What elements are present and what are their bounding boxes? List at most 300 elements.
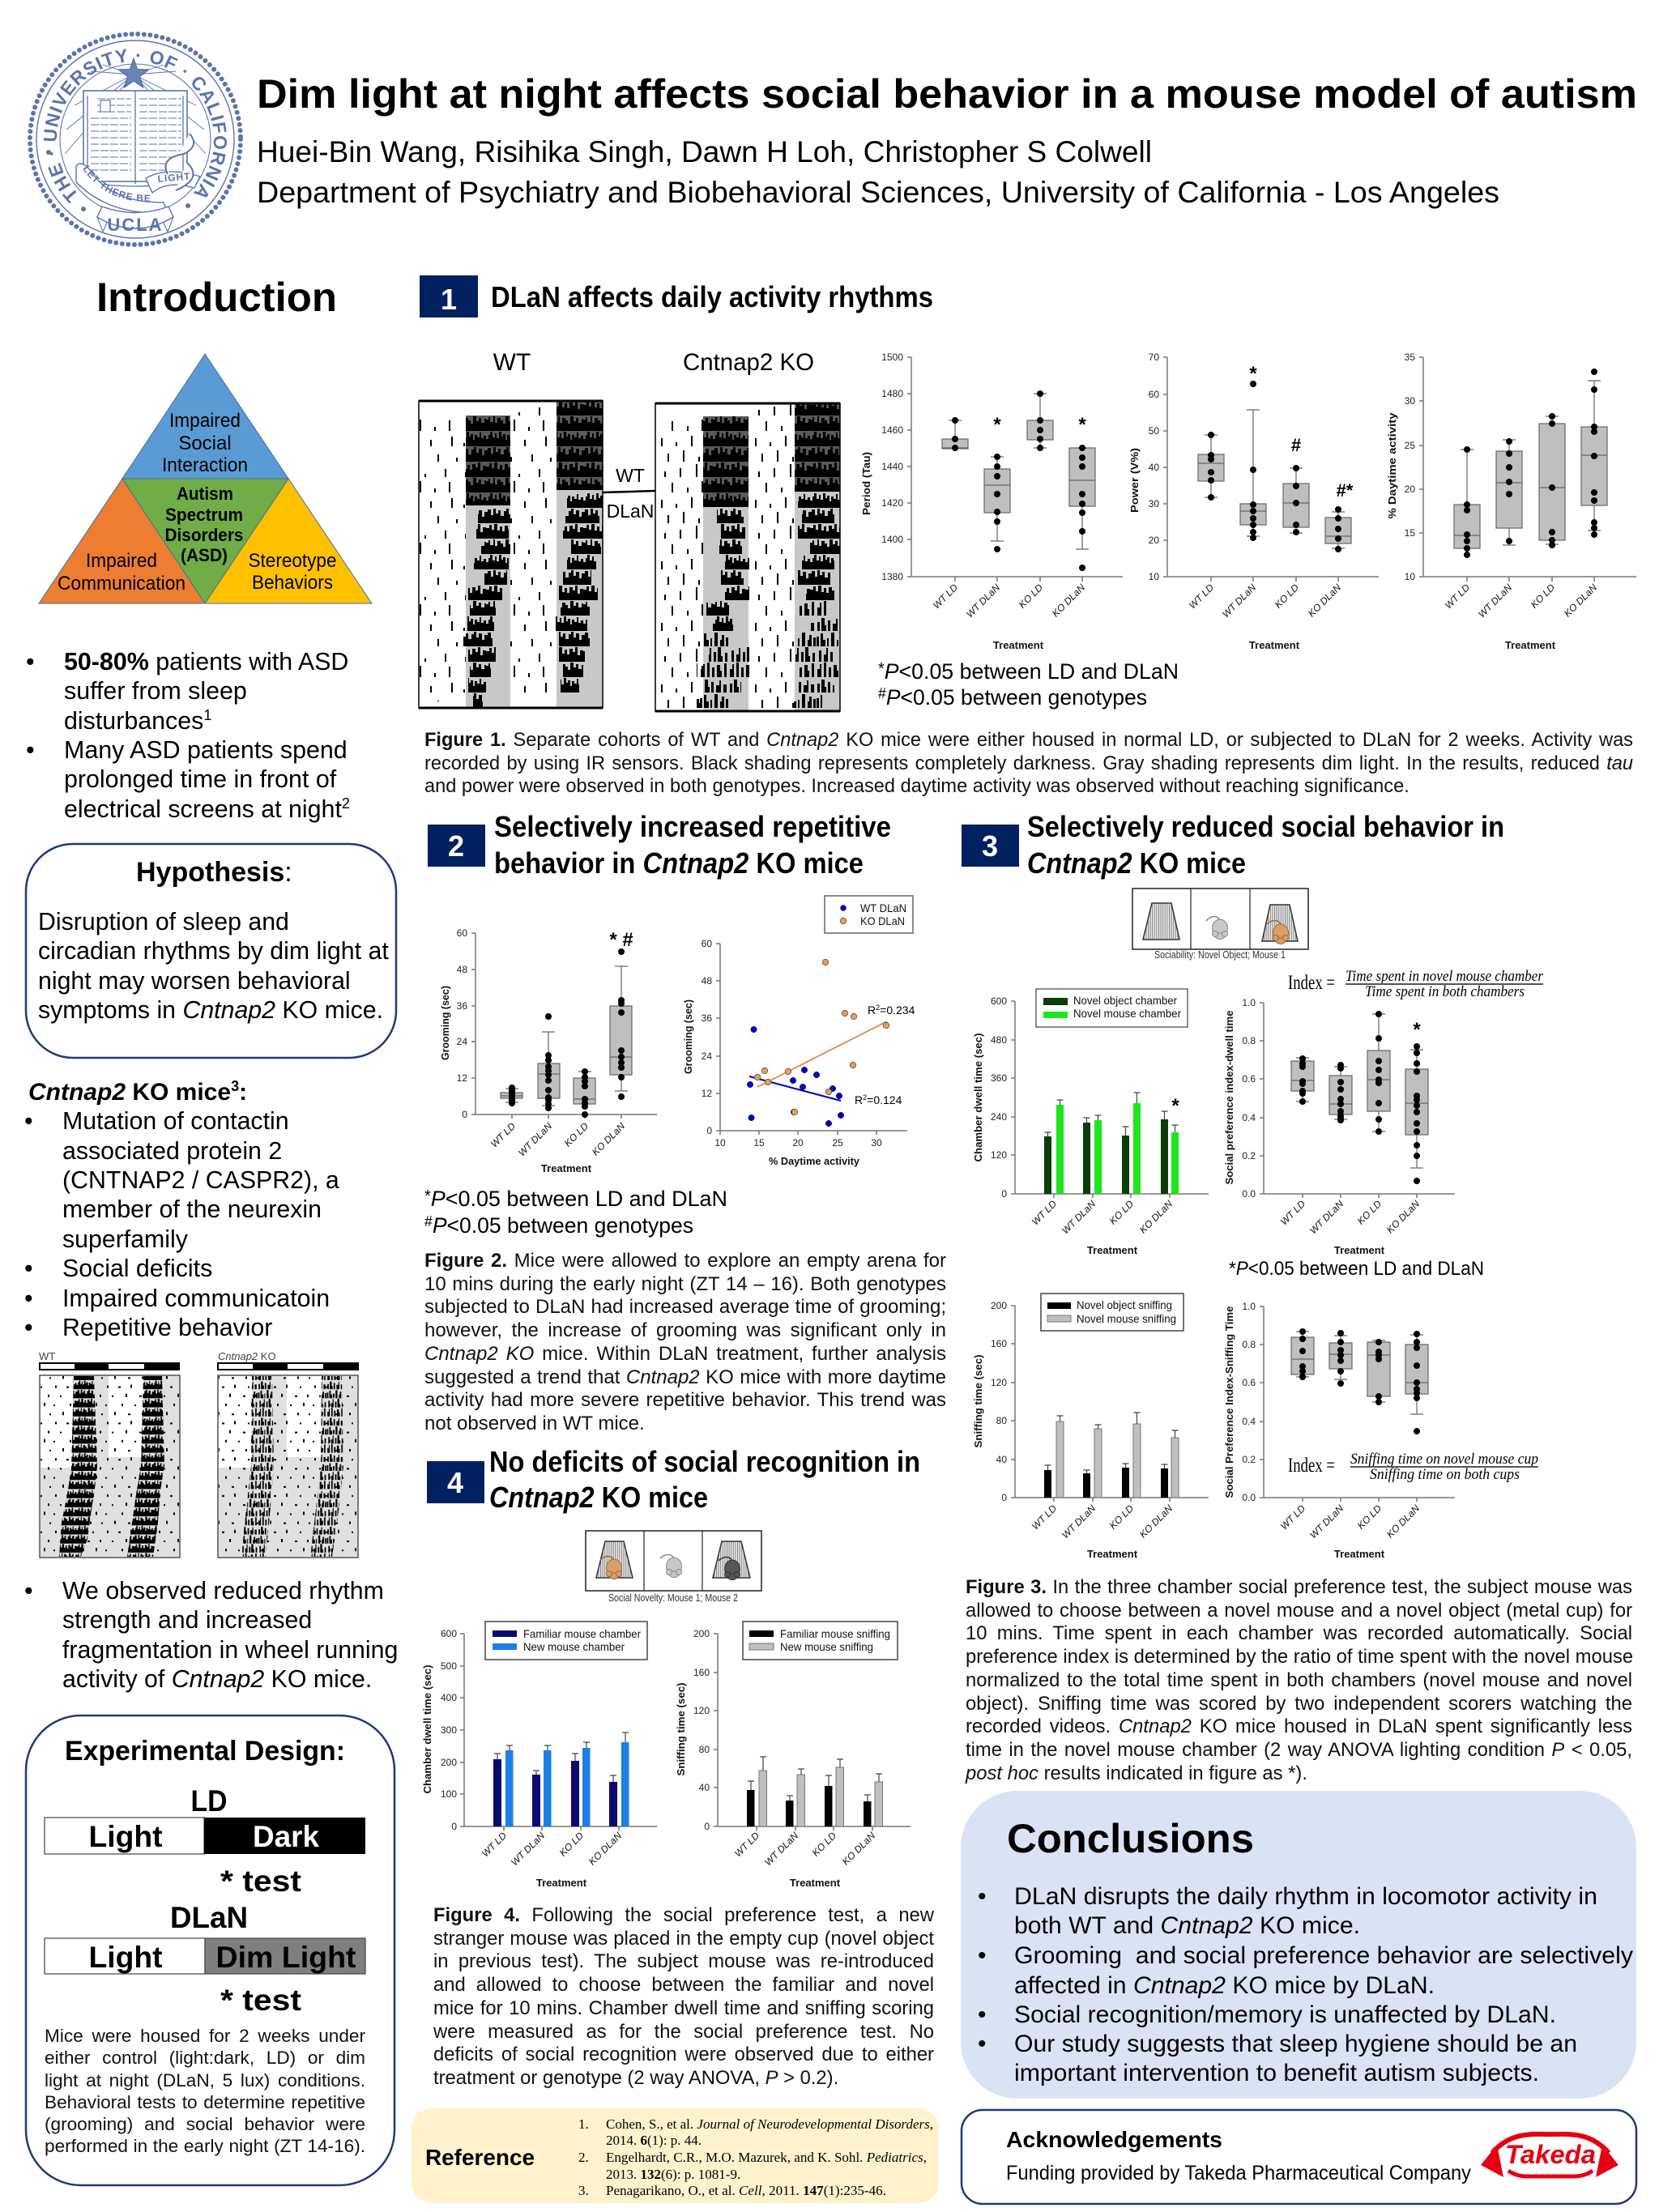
section 4 number badge <box>427 1461 484 1503</box>
panel: acknowledgements: Acknowledgements <box>1006 2127 1222 2152</box>
chart: dwell time preference index box plot: WT DLaN <box>1307 1198 1346 1236</box>
chart: period tau box plot: Treatment <box>993 639 1044 651</box>
caption: figure 3: Figure 3. In the three chamber social preference test, the subject mouse was <box>966 1576 1632 1598</box>
panel: references: Reference <box>425 2145 535 2170</box>
text block: intro bullets: disturbances <box>64 707 203 735</box>
text block: Cntnap2 KO mice: • <box>24 1255 33 1282</box>
chart: period tau box plot: * <box>1078 414 1086 436</box>
panel: hypothesis: circadian rhythms by dim light at <box>38 938 389 965</box>
caption: figure 1: and power were observed in both genotypes. Increased daytime activity was observed without reaching significance. <box>424 776 1410 797</box>
chart: familiar vs new sniffing bars: WT DLaN <box>762 1830 800 1868</box>
chart: sniffing time bars: 80 <box>996 1415 1007 1426</box>
note: figure 2 significance: P <box>433 1213 447 1238</box>
caption: figure 4: and allowed to choose between the familiar and novel <box>433 1974 934 1996</box>
chart: familiar vs new chamber dwell bars: 100 <box>441 1788 457 1800</box>
chart: sniffing time bars: WT DLaN <box>1060 1502 1098 1541</box>
chart: sniffing time bars: Novel object sniffing <box>1077 1298 1172 1311</box>
heading: section 2: behavior in Cntnap2 KO mice <box>494 846 864 880</box>
note: figure 2 significance: # <box>424 1213 433 1230</box>
chart: daytime activity box plot: 35 <box>1405 352 1415 363</box>
chart: daytime activity box plot: 25 <box>1405 440 1415 451</box>
text block: intro bullets: • <box>26 736 35 764</box>
chart: grooming scatter plot: 25 <box>832 1137 843 1149</box>
panel: experimental design: Light <box>89 1820 162 1853</box>
panel: conclusions: • <box>978 1942 987 1969</box>
chart: grooming scatter plot: 15 <box>753 1137 765 1149</box>
chart: small actogram WT: WT <box>39 1350 55 1362</box>
chart: grooming box plot: Grooming (sec) <box>439 986 451 1060</box>
chart: daytime activity box plot: 20 <box>1405 484 1415 495</box>
chart: power box plot: * <box>1249 363 1257 385</box>
chart: familiar vs new chamber dwell bars: Treatment <box>536 1877 587 1889</box>
chart: dwell time preference index box plot: 0.2 <box>1242 1150 1256 1161</box>
chart: familiar vs new sniffing bars: WT LD <box>732 1830 761 1860</box>
panel: conclusions: Social recognition/memory is unaffected by DLaN. <box>1014 2001 1556 2028</box>
chart: familiar vs new sniffing bars: 0 <box>704 1821 710 1832</box>
caption: figure 4: treatment or genotype (2 way ANOVA, P > 0.2). <box>433 2067 838 2089</box>
diagram: ASD triangle: Impaired <box>169 410 241 432</box>
chart: sniffing preference index box plot: KO LD <box>1355 1502 1384 1532</box>
chart: familiar vs new chamber dwell bars: 500 <box>441 1660 457 1672</box>
logo: UCLA seal: LIGHT <box>157 170 191 185</box>
note: figure 2 significance: * <box>424 1187 431 1205</box>
caption: figure 3: allowed to choose between a novel mouse and a novel object (metal cup) for <box>966 1600 1632 1622</box>
text block: rhythm observation: • <box>24 1578 33 1605</box>
chart: familiar vs new sniffing bars: 160 <box>693 1667 710 1678</box>
text block: Cntnap2 KO mice: • <box>24 1315 33 1341</box>
chart: chamber dwell time bars: 120 <box>991 1149 1007 1161</box>
chart: grooming box plot: 24 <box>457 1036 467 1047</box>
panel: references <box>412 2108 939 2203</box>
chart: sniffing time bars <box>972 1294 1209 1560</box>
caption: figure 2: Figure 2. Mice were allowed to explore an empty arena for <box>424 1250 946 1272</box>
logo: Takeda <box>1481 2134 1618 2177</box>
text block: Cntnap2 KO mice: Cntnap2 KO mice <box>28 1079 231 1106</box>
chart: familiar vs new chamber dwell bars: 300 <box>441 1724 457 1736</box>
caption: figure 1: Figure 1. Separate cohorts of WT and Cntnap2 KO mice were either housed in normal LD, or subjected to DLaN for 2 weeks. Activity was <box>424 730 1633 751</box>
chart: familiar vs new chamber dwell bars: New mouse chamber <box>523 1640 625 1653</box>
chart: power box plot: KO DLaN <box>1306 582 1343 619</box>
caption: figure 3: preference index is determined by the ratio of time spent with the novel mouse <box>966 1646 1633 1668</box>
diagram: ASD triangle: Disorders <box>165 525 243 545</box>
chart: daytime activity box plot: % Daytime activity <box>1386 412 1398 518</box>
chart: power box plot: 20 <box>1149 535 1159 546</box>
chart: grooming scatter plot: =0.124 <box>867 1093 902 1106</box>
diagram: ASD triangle: (ASD) <box>181 545 228 565</box>
chart: familiar vs new sniffing bars: 40 <box>699 1782 710 1793</box>
chart: familiar vs new chamber dwell bars: 600 <box>441 1628 457 1639</box>
chart: familiar vs new chamber dwell bars <box>421 1622 657 1889</box>
chart: daytime activity box plot: Treatment <box>1505 639 1556 651</box>
panel: hypothesis: symptoms in Cntnap2 KO mice. <box>38 997 383 1024</box>
chart: familiar vs new chamber dwell bars: WT LD <box>480 1830 509 1860</box>
chart: sniffing preference index box plot: KO DLaN <box>1384 1502 1422 1540</box>
chart: power box plot: KO LD <box>1273 582 1301 611</box>
chart: sniffing time bars: 0 <box>1001 1492 1007 1503</box>
chart: grooming scatter plot: WT DLaN <box>860 901 906 914</box>
chart: daytime activity box plot: 30 <box>1405 395 1415 407</box>
heading: section 4: Cntnap2 KO mice <box>489 1481 708 1514</box>
chart: small actogram KO: Cntnap2 KO <box>218 1350 276 1362</box>
text block: Cntnap2 KO mice: (CNTNAP2 / CASPR2), a <box>62 1167 339 1194</box>
panel: hypothesis: Hypothesis: <box>136 857 292 888</box>
text block: rhythm observation: We observed reduced rhythm <box>62 1578 384 1605</box>
chart: familiar vs new chamber dwell bars: KO DLaN <box>586 1830 624 1867</box>
caption: figure 1 <box>424 730 1633 797</box>
section 2 number badge: 2 <box>448 829 464 863</box>
chart: power box plot: Treatment <box>1249 639 1300 651</box>
note: figure 1 significance: # <box>878 685 886 701</box>
chart: sniffing preference index box plot: 1.0 <box>1242 1301 1256 1312</box>
heading: section 4 <box>489 1445 920 1514</box>
chart: dwell time preference index box plot: 0.0 <box>1242 1188 1256 1200</box>
caption: figure 2: subjected to DLaN had increased average time of grooming; <box>424 1296 946 1318</box>
caption: figure 1: recorded by using IR sensors. Black shading represents completely darkness. Gray shading represents dim light. In the results, reduced tau <box>424 753 1633 774</box>
chart: daytime activity box plot: 15 <box>1405 527 1415 539</box>
chart: sniffing time bars: Novel mouse sniffing <box>1077 1312 1176 1325</box>
chart: power box plot: 40 <box>1149 462 1159 473</box>
chart: period tau box plot: KO DLaN <box>1050 582 1087 619</box>
formula: sniffing index: Index = <box>1288 1455 1335 1477</box>
note: figure 1 significance: P <box>886 685 901 710</box>
caption: figure 2: activity had more severe repetitive behavior. This trend was <box>424 1389 946 1411</box>
section 2 number badge <box>428 825 485 867</box>
logo: UCLA seal <box>28 32 243 247</box>
text block: intro bullets: prolonged time in front of <box>64 765 337 793</box>
chart: small actogram KO <box>217 1350 359 1558</box>
chart: grooming scatter plot: % Daytime activity <box>769 1155 860 1167</box>
panel: references: 3. <box>578 2183 589 2198</box>
label: WT actogram title: WT <box>493 349 531 376</box>
caption: figure 4: deficits of social recognition were observed due to either <box>433 2044 934 2065</box>
chart: grooming box plot: 36 <box>457 1000 467 1012</box>
chart: grooming scatter plot: 0 <box>706 1125 712 1136</box>
text block: intro bullets: 50-80% patients with ASD <box>64 648 348 676</box>
text block: experimental design description: performed in the early night (ZT 14-16). <box>45 2136 365 2156</box>
chart: chamber dwell time bars: KO LD <box>1107 1198 1136 1227</box>
logo: Takeda: Takeda <box>1505 2140 1596 2169</box>
chart: chamber dwell time bars <box>972 989 1209 1256</box>
text block: intro bullets: 1 <box>203 707 211 723</box>
chart: chamber dwell time bars: Novel object chamber <box>1073 994 1177 1007</box>
formula: sniffing index: Sniffing time on both cups <box>1370 1466 1520 1483</box>
chart: grooming scatter plot: 60 <box>702 938 712 949</box>
chart: familiar vs new chamber dwell bars: Chamber dwell time (sec) <box>421 1665 433 1793</box>
chart: power box plot: 30 <box>1149 498 1159 509</box>
chart: dwell time preference index box plot: 1.0 <box>1242 997 1256 1008</box>
panel: experimental design: Light <box>89 1941 162 1974</box>
text block: experimental design description: Behavioral tests to determine repetitive <box>45 2092 365 2112</box>
chart: chamber dwell time bars: 480 <box>991 1034 1007 1046</box>
chart: chamber dwell time bars: 600 <box>991 995 1007 1007</box>
panel: conclusions: DLaN disrupts the daily rhythm in locomotor activity in <box>1014 1883 1597 1910</box>
diagram: ASD triangle: Behaviors <box>252 572 333 594</box>
chart: grooming scatter plot <box>682 896 915 1167</box>
panel: conclusions: • <box>978 1883 987 1910</box>
chart: dwell time preference index box plot: 0.6 <box>1242 1073 1256 1085</box>
chart: period tau box plot: 1460 <box>881 424 903 436</box>
title: Dim light at night affects social behavior in a mouse model of autism <box>257 71 1637 117</box>
chart: familiar vs new sniffing bars <box>675 1622 911 1889</box>
chart: power box plot <box>1128 352 1379 651</box>
text block: intro bullets: electrical screens at night <box>64 795 342 823</box>
text block: rhythm observation <box>24 1578 398 1693</box>
chart: sniffing time bars: 40 <box>996 1454 1007 1465</box>
panel: conclusions: both WT and Cntnap2 KO mice. <box>1014 1912 1360 1939</box>
chart: grooming box plot: WT DLaN <box>516 1120 554 1158</box>
text block: Cntnap2 KO mice: associated protein 2 <box>62 1138 282 1165</box>
chart: chamber dwell time bars: 360 <box>991 1072 1007 1084</box>
heading: Introduction: Introduction <box>96 275 337 320</box>
panel: conclusions: • <box>978 2001 987 2028</box>
chart: power box plot: 50 <box>1149 425 1159 437</box>
chart: dwell time preference index box plot: WT LD <box>1278 1198 1307 1228</box>
panel: experimental design: Dim Light <box>215 1941 356 1974</box>
panel: experimental design: DLaN <box>170 1901 248 1934</box>
chart: period tau box plot: WT LD <box>931 582 960 612</box>
chart: chamber dwell time bars: 0 <box>1001 1188 1007 1200</box>
chart: familiar vs new chamber dwell bars: 400 <box>441 1692 457 1703</box>
chart: power box plot: 60 <box>1149 389 1159 400</box>
icon: social novelty three chamber <box>586 1531 761 1604</box>
caption: figure 4 <box>433 1904 934 2089</box>
panel: references: 1. <box>578 2116 589 2132</box>
chart: daytime activity box plot: WT LD <box>1443 582 1472 612</box>
section 1 number badge <box>420 275 478 318</box>
logo: UCLA seal: LET THERE BE <box>83 165 151 202</box>
chart: grooming box plot: * # <box>609 929 633 951</box>
chart: familiar vs new sniffing bars: 120 <box>693 1705 710 1716</box>
chart: familiar vs new chamber dwell bars: WT DLaN <box>509 1830 547 1868</box>
caption: figure 3: 10 mins. Time spent in each chamber was recorded automatically. Social <box>966 1622 1632 1644</box>
affiliation: Department of Psychiatry and Biobehavioral Sciences, University of California - Los Angeles <box>257 176 1499 209</box>
text block: intro bullets: Many ASD patients spend <box>64 736 348 764</box>
panel: references: 2. <box>578 2150 589 2165</box>
text block: Cntnap2 KO mice: superfamily <box>62 1226 189 1253</box>
icon: sociability three chamber <box>1132 889 1308 961</box>
section 1 number badge: 1 <box>441 283 457 316</box>
chart: grooming scatter plot: 48 <box>702 975 712 987</box>
chart: daytime activity box plot: 10 <box>1405 571 1415 582</box>
panel: references: 2014. 6(1): p. 44. <box>606 2133 702 2148</box>
note: figure 2 significance: P <box>431 1187 446 1211</box>
panel: conclusions: important intervention to benefit autism subjects. <box>1014 2060 1539 2086</box>
text block: Cntnap2 KO mice: Mutation of contactin <box>62 1108 289 1135</box>
chart: familiar vs new sniffing bars: Familiar mouse sniffing <box>780 1627 890 1640</box>
caption: figure 2: Cntnap2 KO mice. Within DLaN treatment, further analysis <box>424 1343 946 1365</box>
diagram: ASD triangle: Interaction <box>162 454 248 476</box>
chart: period tau box plot: 1420 <box>881 497 903 509</box>
chart: actogram WT <box>419 401 603 708</box>
caption: figure 4: stranger mouse was placed in the empty cup (novel object <box>433 1928 934 1950</box>
chart: grooming scatter plot: 30 <box>871 1137 882 1149</box>
text block: intro bullets: 2 <box>342 795 350 812</box>
panel: acknowledgements <box>962 2110 1636 2204</box>
chart: power box plot: 70 <box>1149 352 1159 363</box>
caption: figure 3: time in the novel mouse chamber (2 way ANOVA lighting condition P < 0.05, <box>966 1739 1632 1761</box>
chart: dwell time preference index box plot: KO LD <box>1355 1198 1384 1227</box>
chart: actogram KO <box>655 403 840 711</box>
panel: hypothesis: Disruption of sleep and <box>38 909 289 936</box>
chart: chamber dwell time bars: KO DLaN <box>1137 1198 1175 1235</box>
chart: sniffing time bars: 120 <box>991 1377 1007 1388</box>
chart: chamber dwell time bars: WT DLaN <box>1060 1198 1098 1236</box>
chart: dwell time preference index box plot: * <box>1413 1019 1421 1041</box>
caption: figure 4: Figure 4. Following the social preference test, a new <box>433 1904 934 1926</box>
chart: power box plot: WT LD <box>1187 582 1216 612</box>
chart: grooming box plot: 12 <box>457 1072 467 1084</box>
text block: Cntnap2 KO mice: Repetitive behavior <box>62 1315 272 1341</box>
diagram: ASD triangle: Autism <box>177 484 233 504</box>
chart: familiar vs new sniffing bars: New mouse sniffing <box>780 1640 873 1653</box>
label: WT / DLaN divider <box>603 465 655 522</box>
section 3 number badge: 3 <box>982 829 998 863</box>
caption: figure 3: object). Sniffing time was scored by two independent scorers watching the <box>966 1693 1632 1715</box>
panel: hypothesis: night may worsen behavioral <box>38 968 351 995</box>
text block: intro bullets <box>26 648 350 823</box>
chart: period tau box plot: 1440 <box>881 461 903 472</box>
caption: figure 4: were measured as for the social preference test. No <box>433 2021 934 2043</box>
chart: period tau box plot: WT DLaN <box>964 582 1002 620</box>
panel: acknowledgements: Funding provided by Takeda Pharmaceutical Company <box>1006 2162 1471 2184</box>
panel: references: 2013. 132(6): p. 1081-9. <box>606 2167 740 2182</box>
chart: familiar vs new chamber dwell bars: 200 <box>441 1757 457 1768</box>
formula: dwell index: Index = <box>1288 972 1335 994</box>
panel: experimental design: Experimental Design: <box>65 1736 345 1767</box>
diagram: ASD triangle: Impaired <box>86 550 157 572</box>
chart: daytime activity box plot: WT DLaN <box>1476 582 1514 620</box>
section 3 number badge <box>962 825 1019 867</box>
text block: experimental design description <box>45 2026 365 2156</box>
panel: hypothesis <box>26 844 396 1058</box>
text block: experimental design description: Mice were housed for 2 weeks under <box>45 2026 365 2046</box>
note: figure 2 significance: <0.05 between genotypes <box>447 1213 698 1238</box>
chart: grooming scatter plot: 20 <box>792 1137 804 1149</box>
caption: figure 3: normalized to the total time spent in both chambers (novel mouse and novel <box>966 1669 1632 1691</box>
caption: figure 2: suggested a trend that Cntnap2 KO mice with more daytime <box>424 1366 946 1388</box>
formula: dwell index: Time spent in novel mouse chamber <box>1346 968 1544 985</box>
chart: period tau box plot: KO LD <box>1017 582 1045 611</box>
chart: grooming box plot: KO DLaN <box>590 1120 627 1157</box>
chart: daytime activity box plot <box>1386 352 1636 651</box>
chart: period tau box plot: * <box>993 414 1001 436</box>
section 4 number badge: 4 <box>447 1466 463 1499</box>
chart: dwell time preference index box plot: 0.8 <box>1242 1035 1256 1046</box>
chart: grooming scatter plot: 24 <box>702 1051 712 1062</box>
chart: familiar vs new chamber dwell bars: 0 <box>451 1821 457 1832</box>
chart: chamber dwell time bars: * <box>1171 1095 1179 1117</box>
diagram: ASD triangle: Stereotype <box>248 550 337 572</box>
heading: section 3: Selectively reduced social behavior in <box>1027 810 1504 843</box>
heading: section 2: Selectively increased repetitive <box>494 810 891 843</box>
caption: figure 4: in previous test). The subject mouse was re-introduced <box>433 1950 934 1972</box>
panel: conclusions: Conclusions <box>1007 1816 1254 1861</box>
panel: conclusions: Grooming and social preference behavior are selectively <box>1014 1942 1633 1969</box>
chart: small actogram WT <box>39 1350 180 1558</box>
panel: conclusions: Our study suggests that sleep hygiene should be an <box>1014 2031 1577 2057</box>
formula: dwell index <box>1288 968 1544 1000</box>
diagram: ASD triangle: Spectrum <box>165 505 243 525</box>
chart: chamber dwell time bars: Treatment <box>1087 1244 1138 1256</box>
diagram: ASD triangle: Communication <box>58 573 186 595</box>
chart: grooming box plot: WT LD <box>488 1120 518 1150</box>
chart: dwell time preference index box plot: 0.4 <box>1242 1112 1256 1123</box>
panel: conclusions: • <box>978 2031 987 2057</box>
logo: UCLA seal: THE · UNIVERSITY · OF · CALIFORNIA <box>44 49 227 204</box>
chart: chamber dwell time bars: Chamber dwell time (sec) <box>972 1034 984 1161</box>
chart: grooming box plot: 0 <box>462 1109 467 1120</box>
text block: intro bullets: suffer from sleep <box>64 677 247 705</box>
chart: grooming box plot: 60 <box>457 927 467 939</box>
chart: power box plot: WT DLaN <box>1220 582 1258 620</box>
chart: grooming scatter plot: 12 <box>702 1088 712 1099</box>
panel: experimental design <box>26 1715 394 2185</box>
chart: familiar vs new sniffing bars: Sniffing time (sec) <box>675 1682 687 1776</box>
text block: Cntnap2 KO mice: 3 <box>231 1078 239 1094</box>
caption: figure 2: not observed in WT mice. <box>424 1413 645 1434</box>
chart: sniffing preference index box plot: Treatment <box>1334 1548 1385 1560</box>
chart: familiar vs new sniffing bars: KO LD <box>810 1830 838 1859</box>
diagram: ASD triangle: Social <box>178 433 232 454</box>
text block: intro bullets: • <box>26 648 35 676</box>
chart: power box plot: #* <box>1337 480 1354 501</box>
chart: familiar vs new sniffing bars: 200 <box>693 1628 710 1639</box>
icon: social novelty three chamber: Social Novelty: Mouse 1; Mouse 2 <box>608 1592 738 1604</box>
chart: familiar vs new sniffing bars: Treatment <box>790 1877 841 1889</box>
chart: grooming scatter plot: Grooming (sec) <box>682 999 694 1074</box>
panel: experimental design: LD <box>191 1784 227 1818</box>
chart: grooming box plot <box>439 927 657 1174</box>
caption: figure 4: mice for 10 mins. Chamber dwell time and sniffing scoring <box>433 1997 934 2019</box>
chart: sniffing time bars: 200 <box>991 1300 1007 1311</box>
note: figure 3 significance: *P<0.05 between LD and DLaN <box>1229 1258 1484 1280</box>
chart: grooming box plot: Treatment <box>541 1162 592 1174</box>
chart: chamber dwell time bars: WT LD <box>1030 1198 1059 1228</box>
caption: figure 2: 10 mins during the early night (ZT 14 – 16). Both genotypes <box>424 1273 946 1295</box>
chart: period tau box plot: Period (Tau) <box>860 452 872 515</box>
panel: experimental design: * test <box>220 1865 301 1898</box>
formula: dwell index: Time spent in both chambers <box>1365 983 1525 1000</box>
panel: experimental design: Dark <box>253 1820 319 1853</box>
note: figure 1 significance: <0.05 between LD and DLaN <box>899 659 1182 684</box>
text block: rhythm observation: activity of Cntnap2 KO mice. <box>62 1666 372 1693</box>
text block: experimental design description: light at night (DLaN, 5 lux) conditions. <box>45 2070 365 2091</box>
chart: period tau box plot: 1400 <box>881 534 903 545</box>
chart: dwell time preference index box plot: Social preference index-dwell time <box>1223 1011 1235 1184</box>
note: figure 1 significance <box>878 659 1179 710</box>
heading: section 2 <box>494 810 891 880</box>
caption: figure 2: however, the increase of grooming was significant only in <box>424 1319 946 1341</box>
chart: sniffing time bars: Treatment <box>1087 1548 1138 1560</box>
chart: grooming box plot: 48 <box>457 964 467 975</box>
heading: section 3: Cntnap2 KO mice <box>1027 846 1246 880</box>
panel: references: Engelhardt, C.R., M.O. Mazurek, and K. Sohl. Pediatrics, <box>606 2150 927 2165</box>
note: figure 2 significance: <0.05 between LD and DLaN <box>446 1187 728 1211</box>
chart: chamber dwell time bars: Novel mouse chamber <box>1073 1007 1181 1020</box>
chart: grooming scatter plot: =0.234 <box>880 1004 915 1016</box>
chart: sniffing preference index box plot: 0.6 <box>1242 1377 1256 1388</box>
text block: rhythm observation: strength and increased <box>62 1607 312 1634</box>
chart: sniffing preference index box plot <box>1223 1301 1455 1560</box>
caption: figure 3: recorded videos. Cntnap2 KO mice housed in DLaN spent significantly less <box>966 1715 1632 1737</box>
formula: sniffing index: Sniffing time on novel mouse cup <box>1350 1451 1538 1468</box>
note: figure 2 significance <box>424 1187 727 1238</box>
chart: sniffing time bars: KO LD <box>1107 1502 1136 1532</box>
chart: sniffing preference index box plot: 0.0 <box>1242 1492 1256 1503</box>
chart: grooming scatter plot: R <box>855 1093 863 1106</box>
chart: sniffing preference index box plot: 0.4 <box>1242 1416 1256 1427</box>
text block: Cntnap2 KO mice <box>24 1078 339 1341</box>
